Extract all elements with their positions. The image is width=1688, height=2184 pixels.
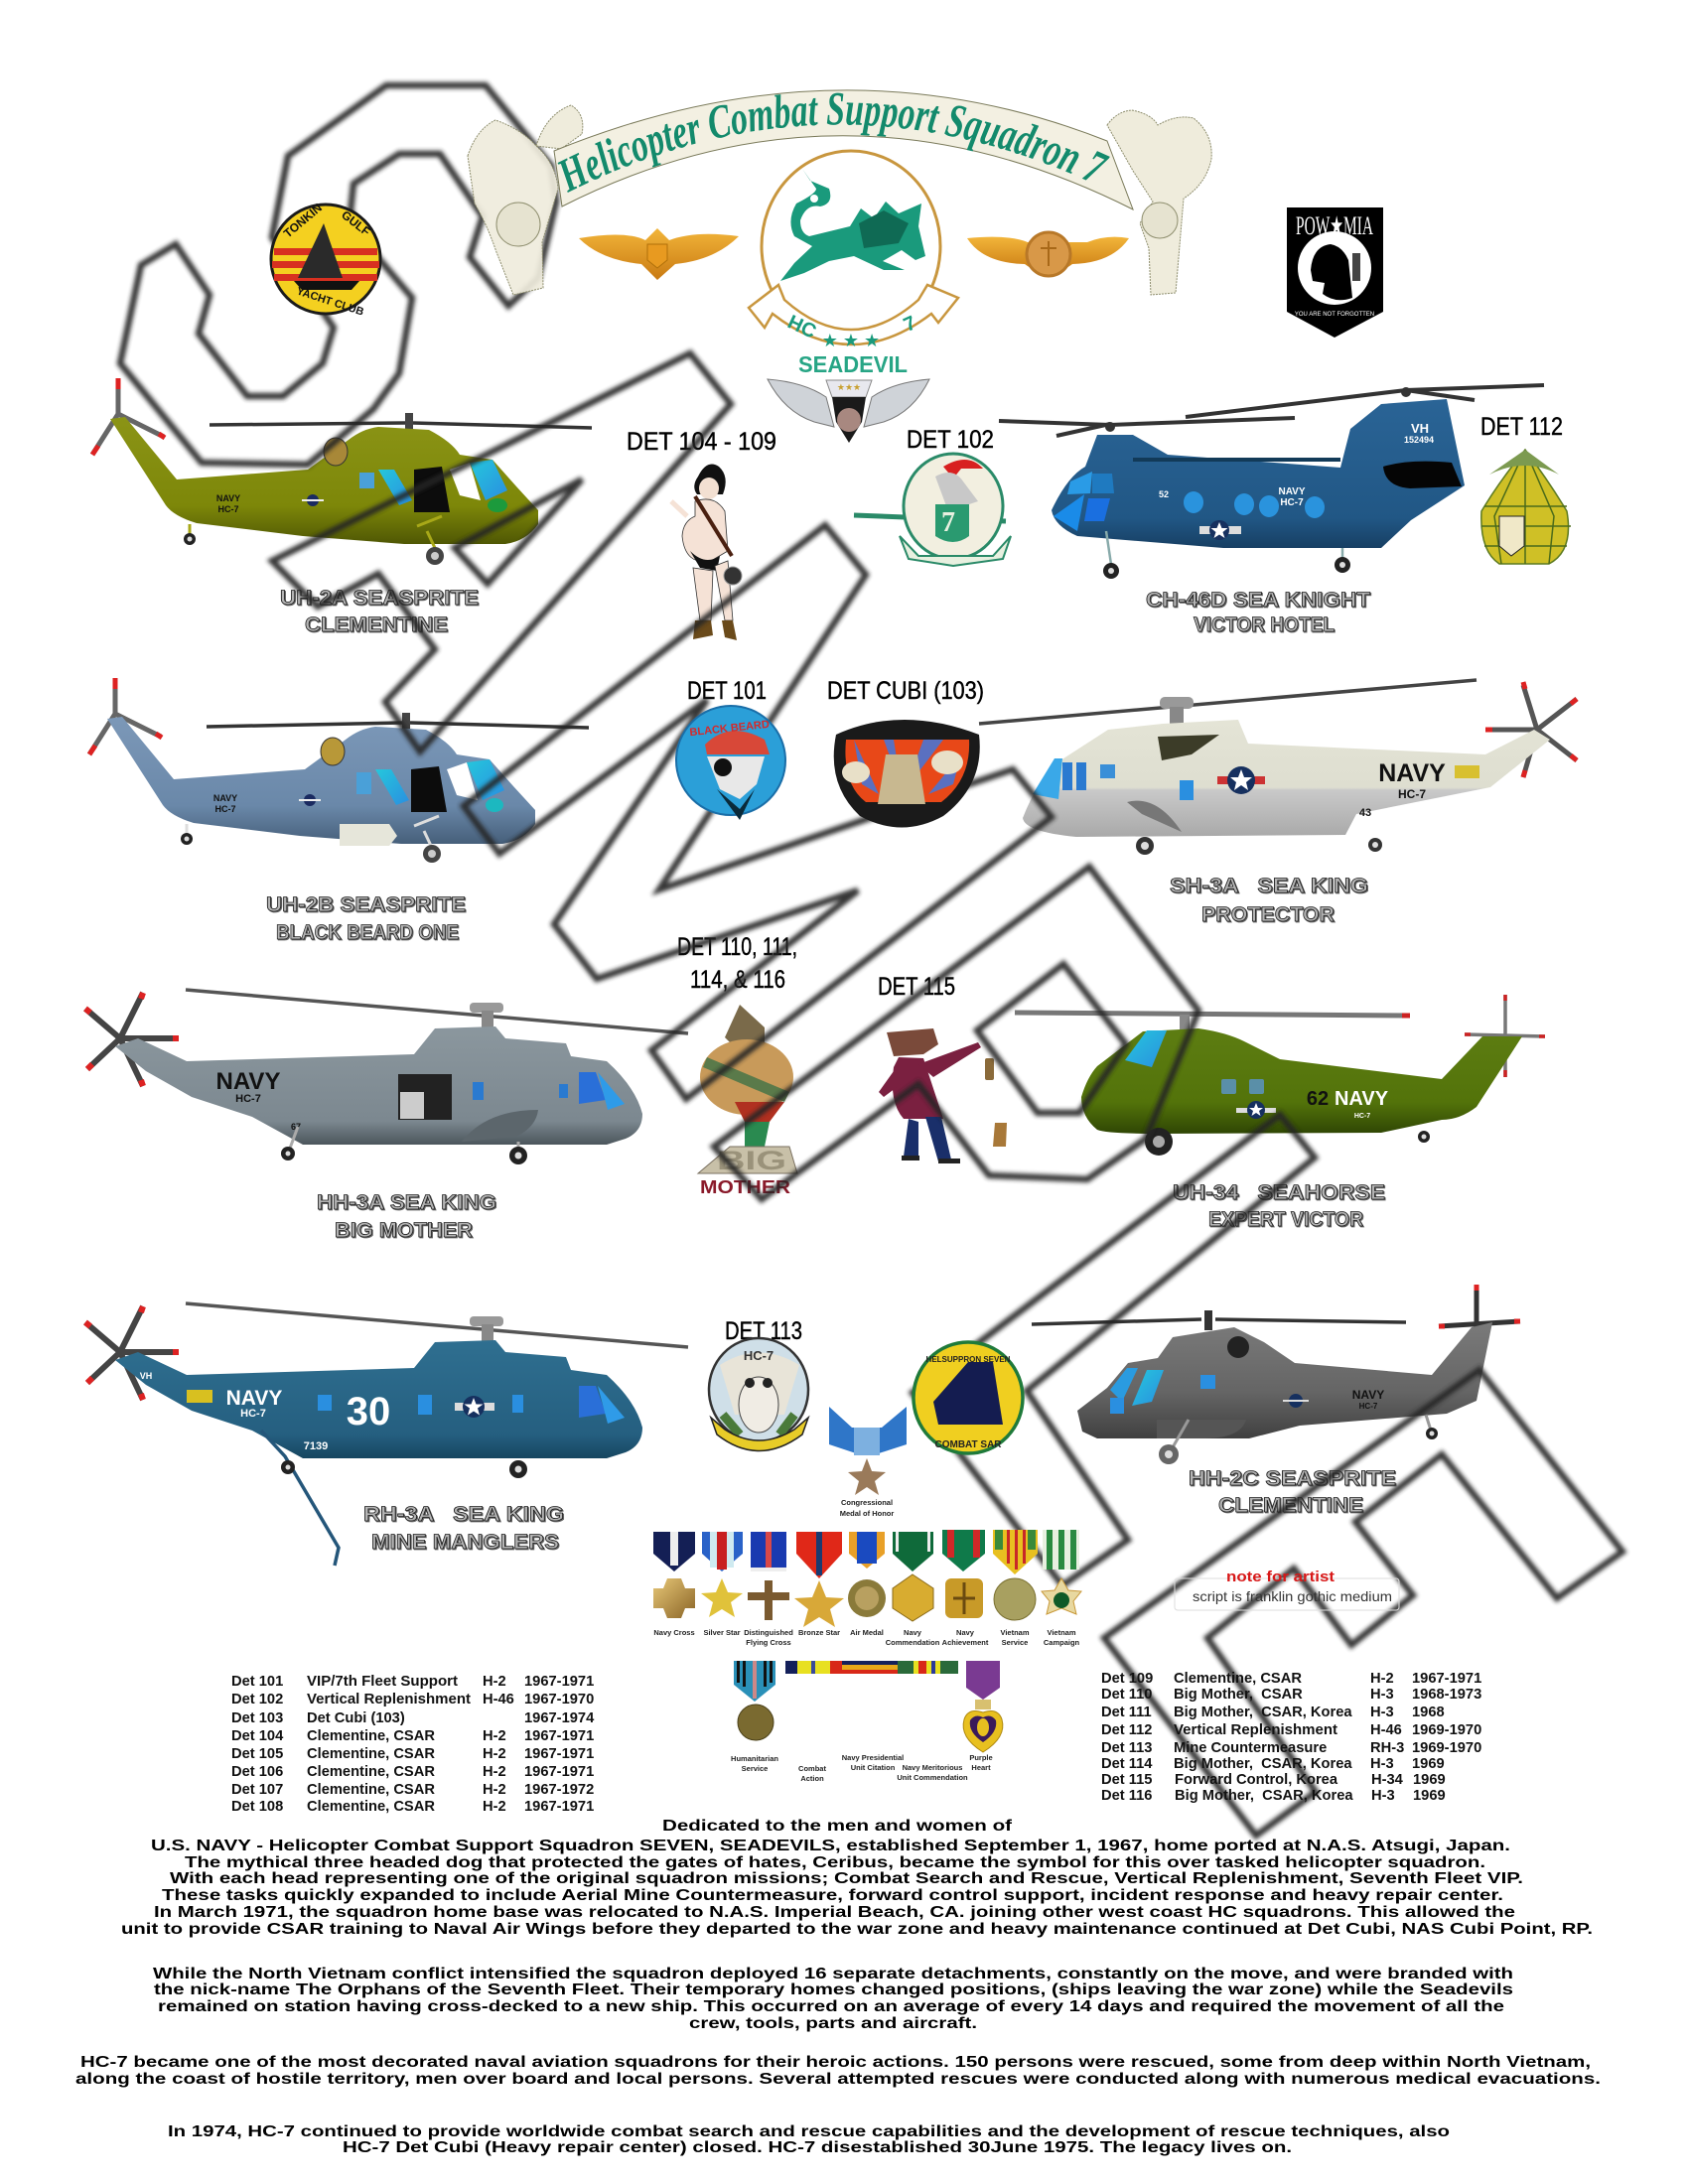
medal: Distinguished Flying Cross: Flying Cross xyxy=(746,1638,791,1647)
table: detachments 101-108: 1967-1971 xyxy=(524,1764,594,1780)
label: CH-46D Sea Knight: CH-46D SEA KNIGHT xyxy=(1146,589,1370,612)
icon: Det 112 cargo net xyxy=(1481,450,1571,564)
text block: orphans of the Seventh Fleet: remained on station having cross-decked to a new ship. This occurred on an average of every 14 days and required the movement of all the xyxy=(158,1998,1504,2015)
helicopter: SH-3A Sea King Protector: 43 xyxy=(1359,807,1371,819)
table: detachments 101-108: 1967-1970 xyxy=(524,1692,594,1707)
text block: decorated squadron xyxy=(75,2054,1601,2088)
helicopter: UH-34 Seahorse Expert Victor: 62 xyxy=(1307,1088,1329,1110)
helicopter: RH-3A Sea King Mine Manglers: HC-7 xyxy=(240,1408,266,1420)
helicopter: CH-46D Sea Knight Victor Hotel: HC-7 xyxy=(1280,497,1304,508)
icon: POW-MIA flag xyxy=(1287,207,1383,338)
label: UH-2A Seasprite: UH-2A SEASPRITE xyxy=(280,587,479,610)
helicopter: CH-46D Sea Knight Victor Hotel: NAVY xyxy=(1278,486,1306,497)
icon: aviator wings left xyxy=(579,228,739,280)
helicopter: SH-3A Sea King Protector xyxy=(979,680,1577,855)
squadron crest: Seadevil: HC xyxy=(784,311,819,343)
table: detachments 109-116: Big Mother, CSAR xyxy=(1174,1687,1303,1703)
icon: POW-MIA flag: YOU ARE NOT FORGOTTEN xyxy=(1295,312,1374,318)
medal: Navy Cross: Navy Cross xyxy=(653,1628,695,1637)
icon: aircrew wings right xyxy=(967,232,1129,276)
medals lower row xyxy=(731,1661,1003,1783)
table: detachments 109-116: Det 116 xyxy=(1101,1788,1152,1804)
table: detachments 109-116: H-2 xyxy=(1370,1671,1394,1687)
table: detachments 101-108: Det 105 xyxy=(231,1746,283,1762)
icon: Det 101 Black Beard patch xyxy=(676,706,785,820)
table: detachments 109-116: H-3 xyxy=(1370,1705,1394,1720)
table: detachments 109-116: Big Mother, CSAR, Korea xyxy=(1174,1756,1352,1772)
table: detachments 109-116: Big Mother, CSAR, Korea xyxy=(1175,1788,1353,1804)
table: detachments 101-108: Det 104 xyxy=(231,1728,284,1744)
table: detachments 101-108: Clementine, CSAR xyxy=(307,1782,435,1798)
detachment heading: DET 115: DET 115 xyxy=(878,973,955,1001)
callout: note for artist: note for artist xyxy=(1226,1569,1335,1585)
detachment heading: DET 101: DET 101 xyxy=(687,677,767,705)
ribbon bar: unit awards: Navy Presidential xyxy=(842,1753,904,1762)
helicopter: CH-46D Sea Knight Victor Hotel: 52 xyxy=(1159,489,1169,499)
medal: Vietnam Service xyxy=(993,1530,1038,1647)
table: detachments 109-116: H-34 xyxy=(1371,1772,1404,1788)
text block: dedication: With each head representing one of the original squadron missions; Combat Search and Rescue, Vertical Replenishment, Seventh Fleet VIP. xyxy=(170,1870,1523,1887)
icon: Congressional Medal of Honor xyxy=(829,1407,907,1495)
watermark letter L xyxy=(913,1115,1315,1585)
icon: Det 102 knight patch: 7 xyxy=(941,507,955,538)
text block: dedication: Dedicated to the men and women of xyxy=(662,1818,1013,1835)
title: Helicopter Combat Support Squadron 7 xyxy=(558,93,1110,193)
table: detachments 101-108: H-2 xyxy=(483,1764,506,1780)
label: UH-2B Seasprite: UH-2B SEASPRITE xyxy=(266,893,466,916)
callout: note for artist xyxy=(1175,1569,1399,1610)
ribbon bar: unit awards: Unit Citation xyxy=(851,1763,896,1772)
medal: Vietnam Campaign: Vietnam xyxy=(1047,1628,1076,1637)
detachment heading: DET 112: DET 112 xyxy=(1480,413,1563,441)
helicopter: HH-3A Sea King Big Mother xyxy=(85,990,688,1164)
medal: Humanitarian Service: Humanitarian xyxy=(731,1754,778,1763)
detachment heading: DET 102: DET 102 xyxy=(907,426,994,454)
icon: Det 102 knight patch xyxy=(854,454,1011,566)
table: detachments 101-108: Det 103 xyxy=(231,1710,283,1726)
medal: Vietnam Campaign xyxy=(1042,1530,1081,1647)
table: detachments 101-108: H-2 xyxy=(483,1674,506,1690)
icon: Det 115 mascot xyxy=(879,1028,1007,1163)
icon: Det 113 Mine Manglers patch: HC-7 xyxy=(744,1348,774,1363)
table: detachments 109-116: 1968 xyxy=(1412,1705,1445,1720)
icon: Det 113 Mine Manglers patch xyxy=(709,1338,808,1451)
table: detachments 101-108: 1967-1972 xyxy=(524,1782,594,1798)
medal: Humanitarian Service: Service xyxy=(742,1764,768,1773)
callout: note for artist: script is franklin gothic medium xyxy=(1193,1588,1392,1604)
helicopter: HH-2C Seasprite Clementine xyxy=(1032,1285,1520,1464)
table: detachments 109-116: H-46 xyxy=(1370,1722,1402,1738)
detachment heading: DET 110, 111: DET 110, 111, xyxy=(677,933,797,961)
table: detachments 101-108: H-2 xyxy=(483,1728,506,1744)
table: detachments 109-116: Det 112 xyxy=(1101,1722,1152,1738)
medal: Distinguished Flying Cross: Distinguished xyxy=(744,1628,793,1637)
table: detachments 109-116: Big Mother, CSAR, Korea xyxy=(1174,1705,1352,1720)
table: detachments 101-108: Det Cubi (103) xyxy=(307,1710,405,1726)
label: UH-34 Seahorse: UH-34 SEAHORSE xyxy=(1173,1181,1385,1204)
table: detachments 101-108: 1967-1971 xyxy=(524,1746,594,1762)
table: detachments 109-116: 1969 xyxy=(1412,1756,1445,1772)
text block: dedication: These tasks quickly expanded to include Aerial Mine Countermeasure, forward control support, incident response and heavy repair center. xyxy=(162,1887,1503,1904)
helicopter: UH-34 Seahorse Expert Victor: HC-7 xyxy=(1354,1113,1370,1120)
text block: decorated squadron: HC-7 became one of the most decorated naval aviation squadrons for their heroic actions. 150 persons were rescued, some from deep within North Vietnam, xyxy=(80,2054,1591,2071)
icon: Tonkin Gulf Yacht Club patch: GULF xyxy=(339,207,373,238)
table: detachments 101-108: H-46 xyxy=(483,1692,514,1707)
table: detachments 101-108: Det 107 xyxy=(231,1782,283,1798)
label: RH-3A Sea King: RH-3A SEA KING xyxy=(363,1503,564,1526)
medal: Navy Achievement xyxy=(942,1530,989,1647)
table: detachments 101-108: 1967-1971 xyxy=(524,1799,594,1815)
table: detachments 101-108: H-2 xyxy=(483,1799,506,1815)
detachment heading: DET 104 - 109: DET 104 - 109 xyxy=(627,428,776,456)
label: Big Mother: BIG MOTHER xyxy=(335,1219,473,1242)
ribbon bar: unit awards xyxy=(785,1661,968,1783)
table: detachments 109-116: H-3 xyxy=(1370,1756,1394,1772)
table: detachments 101-108: Clementine, CSAR xyxy=(307,1728,435,1744)
table: detachments 101-108: Det 102 xyxy=(231,1692,283,1707)
table: detachments 109-116: Det 113 xyxy=(1101,1740,1152,1756)
table: detachments 101-108: Clementine, CSAR xyxy=(307,1799,435,1815)
medal: Bronze Star xyxy=(794,1532,844,1637)
medal: Air Medal: Air Medal xyxy=(850,1628,884,1637)
icon: Det 110 Big Mother mascot: MOTHER xyxy=(700,1177,790,1197)
table: detachments 101-108: Clementine, CSAR xyxy=(307,1764,435,1780)
label: Congressional Medal of Honor: Medal of Honor xyxy=(840,1509,894,1518)
icon: Det Cubi patch xyxy=(834,720,980,828)
icon: Det 110 Big Mother mascot: BIG xyxy=(717,1146,786,1175)
helicopter: CH-46D Sea Knight Victor Hotel xyxy=(999,385,1544,579)
text block: orphans of the Seventh Fleet: crew, tools, parts and aircraft. xyxy=(689,2015,977,2032)
text block: dedication: unit to provide CSAR training to Naval Air Wings before they departed to the war zone and heavy maintenance continued at Det Cubi, NAS Cubi Point, RP. xyxy=(121,1921,1593,1938)
table: detachments 101-108: Clementine, CSAR xyxy=(307,1746,435,1762)
table: detachments 109-116: 1969-1970 xyxy=(1412,1722,1481,1738)
icon: Combat SAR patch xyxy=(914,1342,1023,1453)
scroll banner with title xyxy=(467,89,1212,296)
medal: Air Medal xyxy=(848,1532,886,1637)
medal: Vietnam Service: Service xyxy=(1002,1638,1028,1647)
ribbon bar: unit awards: Navy Meritorious xyxy=(903,1763,962,1772)
medal: Silver Star: Silver Star xyxy=(703,1628,741,1637)
medal: Navy Commendation: Navy xyxy=(904,1628,922,1637)
medal: Navy Cross xyxy=(653,1532,695,1637)
medal: Purple Heart: Heart xyxy=(971,1763,991,1772)
table: detachments 109-116: Det 114 xyxy=(1101,1756,1153,1772)
helicopter: UH-34 Seahorse Expert Victor: NAVY xyxy=(1335,1088,1389,1110)
text block: dedication: The mythical three headed dog that protected the gates of hates, Ceribus, became the symbol for this over tasked helicopter squadron. xyxy=(185,1854,1485,1871)
label: Mine Manglers: MINE MANGLERS xyxy=(371,1531,559,1554)
helicopter: UH-34 Seahorse Expert Victor xyxy=(1015,995,1545,1156)
medal: Distinguished Flying Cross xyxy=(744,1532,793,1647)
icon: Det 110 Big Mother mascot xyxy=(698,1005,797,1197)
icon: Combat SAR patch: COMBAT SAR xyxy=(934,1439,1002,1450)
medal: Purple Heart xyxy=(963,1661,1003,1772)
text block: legacy: In 1974, HC-7 continued to provide worldwide combat search and rescue capabilities and the development of rescue techniques, also xyxy=(168,2123,1450,2140)
label: Congressional Medal of Honor xyxy=(840,1498,894,1518)
icon: Det 101 Black Beard patch: BLACK BEARD xyxy=(689,719,770,739)
text block: decorated squadron: along the coast of hostile territory, men over board and local persons. Several attempted rescues were conducted along with numerous medical evacuations. xyxy=(75,2071,1601,2088)
label: Congressional Medal of Honor: Congressional xyxy=(841,1498,893,1507)
label: Expert Victor: EXPERT VICTOR xyxy=(1208,1208,1363,1231)
table: detachments 109-116: 1967-1971 xyxy=(1412,1671,1481,1687)
icon: POW-MIA flag: POW★MIA xyxy=(1296,211,1373,240)
label: Black Beard One: BLACK BEARD ONE xyxy=(276,921,459,944)
helicopter: CH-46D Sea Knight Victor Hotel: 152494 xyxy=(1404,435,1434,445)
icon: Combat SAR patch: HELSUPPRON SEVEN xyxy=(926,1355,1011,1364)
table: detachments 101-108: Det 106 xyxy=(231,1764,283,1780)
table: detachments 101-108: Vertical Replenishment xyxy=(307,1692,471,1707)
table: detachments 109-116: H-3 xyxy=(1370,1687,1394,1703)
squadron crest: Seadevil: ★ ★ ★ xyxy=(822,331,880,350)
icon: winged badge: ★★★ xyxy=(837,382,861,392)
label: Protector: PROTECTOR xyxy=(1201,903,1335,926)
table: detachments 101-108: VIP/7th Fleet Support xyxy=(307,1674,458,1690)
medal: Vietnam Service: Vietnam xyxy=(1000,1628,1030,1637)
medal: Navy Achievement: Navy xyxy=(956,1628,975,1637)
helicopter: UH-2B Seasprite Black Beard One: HC-7 xyxy=(214,804,236,814)
text: SEADEVIL: SEADEVIL xyxy=(798,351,908,377)
text block: legacy: HC-7 Det Cubi (Heavy repair center) closed. HC-7 disestablished 30June 1975. The legacy lives on. xyxy=(343,2139,1292,2156)
helicopter: HH-3A Sea King Big Mother: HC-7 xyxy=(235,1093,261,1105)
helicopter: CH-46D Sea Knight Victor Hotel: VH xyxy=(1411,421,1429,436)
helicopter: HH-2C Seasprite Clementine: HC-7 xyxy=(1359,1402,1378,1411)
table: detachments 109-116: RH-3 xyxy=(1370,1740,1404,1756)
text block: dedication xyxy=(121,1818,1593,1938)
medals row xyxy=(653,1530,1081,1647)
table: detachments 101-108: 1967-1974 xyxy=(524,1710,595,1726)
table: detachments 109-116 xyxy=(1101,1671,1481,1804)
label: HH-2C Seasprite: HH-2C SEASPRITE xyxy=(1189,1467,1396,1490)
table: detachments 101-108: Det 108 xyxy=(231,1799,283,1815)
table: detachments 109-116: Vertical Replenishment xyxy=(1174,1722,1337,1738)
helicopter: UH-2A Seasprite Clementine: NAVY xyxy=(216,493,240,503)
table: detachments 109-116: Clementine, CSAR xyxy=(1174,1671,1302,1687)
table: detachments 101-108: Det 101 xyxy=(231,1674,283,1690)
label: Clementine (HH-2C): CLEMENTINE xyxy=(1218,1494,1363,1517)
watermark letter E xyxy=(1104,1370,1622,1836)
table: detachments 109-116: 1969 xyxy=(1413,1788,1446,1804)
ribbon bar: unit awards: Unit Commendation xyxy=(897,1773,968,1782)
helicopter: UH-2B Seasprite Black Beard One xyxy=(89,678,589,863)
table: detachments 109-116: 1969-1970 xyxy=(1412,1740,1481,1756)
watermark letter P xyxy=(714,867,1198,1199)
medal: Purple Heart: Purple xyxy=(969,1753,993,1762)
helicopter: UH-2A Seasprite Clementine: HC-7 xyxy=(217,504,239,514)
table: detachments 109-116: Det 109 xyxy=(1101,1671,1153,1687)
text block: orphans of the Seventh Fleet xyxy=(153,1966,1513,2032)
table: detachments 109-116: Det 110 xyxy=(1101,1687,1152,1703)
table: detachments 101-108: H-2 xyxy=(483,1746,506,1762)
squadron crest: Seadevil xyxy=(749,151,958,350)
detachment heading: DET 113: DET 113 xyxy=(725,1317,802,1345)
helicopter: HH-3A Sea King Big Mother: 67 xyxy=(291,1122,301,1132)
helicopter: HH-3A Sea King Big Mother: NAVY xyxy=(216,1068,280,1095)
table: detachments 101-108 xyxy=(231,1674,595,1815)
table: detachments 101-108: 1967-1971 xyxy=(524,1674,594,1690)
medal: Silver Star xyxy=(701,1532,743,1637)
helicopter: RH-3A Sea King Mine Manglers: NAVY xyxy=(226,1387,282,1410)
label: SH-3A Sea King: SH-3A SEA KING xyxy=(1170,875,1368,897)
medal: Vietnam Campaign: Campaign xyxy=(1044,1638,1080,1647)
helicopter: RH-3A Sea King Mine Manglers xyxy=(85,1303,688,1566)
table: detachments 109-116: 1969 xyxy=(1413,1772,1446,1788)
helicopter: RH-3A Sea King Mine Manglers: VH xyxy=(140,1371,152,1381)
medal: Navy Achievement: Achievement xyxy=(942,1638,989,1647)
helicopter: RH-3A Sea King Mine Manglers: 30 xyxy=(347,1390,390,1433)
table: detachments 109-116: Det 115 xyxy=(1101,1772,1152,1788)
table: detachments 101-108: H-2 xyxy=(483,1782,506,1798)
text block: legacy xyxy=(168,2123,1450,2156)
detachment heading: DET CUBI (103): DET CUBI (103) xyxy=(827,677,984,705)
helicopter: UH-2B Seasprite Black Beard One: NAVY xyxy=(213,793,237,803)
medal: Navy Commendation: Commendation xyxy=(886,1638,940,1647)
medal: Navy Commendation xyxy=(886,1532,940,1647)
table: detachments 109-116: Det 111 xyxy=(1101,1705,1152,1720)
label: Victor Hotel: VICTOR HOTEL xyxy=(1194,614,1335,636)
table: detachments 109-116: Forward Control, Korea xyxy=(1175,1772,1338,1788)
icon: winged badge xyxy=(768,379,929,443)
helicopter: UH-2A Seasprite Clementine xyxy=(92,378,592,565)
squadron crest: Seadevil: 7 xyxy=(901,312,919,337)
label: Clementine: CLEMENTINE xyxy=(305,614,448,636)
table: detachments 109-116: 1968-1973 xyxy=(1412,1687,1481,1703)
ribbon bar: unit awards: Combat xyxy=(798,1764,826,1773)
table: detachments 109-116: Mine Countermeasure xyxy=(1174,1740,1327,1756)
icon: Tonkin Gulf Yacht Club patch xyxy=(271,201,380,319)
medal: Bronze Star: Bronze Star xyxy=(798,1628,840,1637)
icon: Tonkin Gulf Yacht Club patch: TONKIN xyxy=(281,201,325,240)
medal: Humanitarian Service xyxy=(731,1661,778,1773)
helicopter: SH-3A Sea King Protector: HC-7 xyxy=(1398,787,1426,801)
text block: orphans of the Seventh Fleet: the nick-name The Orphans of the Seventh Fleet. Their temporary homes changed positions, (ships leaving the war zone) while the Seadevils xyxy=(154,1981,1513,1998)
text block: dedication: In March 1971, the squadron home base was relocated to N.A.S. Imperial Beach, CA. joining other west coast HC squadrons. This allowed the xyxy=(154,1904,1515,1921)
icon: Tonkin Gulf Yacht Club patch: YACHT CLUB xyxy=(295,285,365,319)
watermark: SAMPLE outline letters xyxy=(120,85,1622,1836)
watermark letter S xyxy=(120,85,556,465)
ribbon bar: unit awards: Action xyxy=(800,1774,824,1783)
watermark letter A xyxy=(272,353,731,751)
helicopter: RH-3A Sea King Mine Manglers: 7139 xyxy=(304,1440,328,1452)
text block: orphans of the Seventh Fleet: While the North Vietnam conflict intensified the squadron deployed 16 separate detachments, constantly on the move, and were branded with xyxy=(153,1966,1513,1982)
helicopter: SH-3A Sea King Protector: NAVY xyxy=(1378,759,1446,787)
watermark letter M xyxy=(464,525,1052,1099)
detachment heading: 114 and 116: 114, & 116 xyxy=(690,966,785,994)
icon: Det 104-109 pin-up mascot xyxy=(671,465,742,640)
label: HH-3A Sea King: HH-3A SEA KING xyxy=(317,1191,496,1214)
text block: dedication: U.S. NAVY - Helicopter Combat Support Squadron SEVEN, SEADEVILS, established September 1, 1967, home ported at N.A.S. Atsugi, Japan. xyxy=(151,1838,1510,1854)
table: detachments 101-108: 1967-1971 xyxy=(524,1728,594,1744)
helicopter: HH-2C Seasprite Clementine: NAVY xyxy=(1352,1388,1384,1402)
table: detachments 109-116: H-3 xyxy=(1371,1788,1395,1804)
